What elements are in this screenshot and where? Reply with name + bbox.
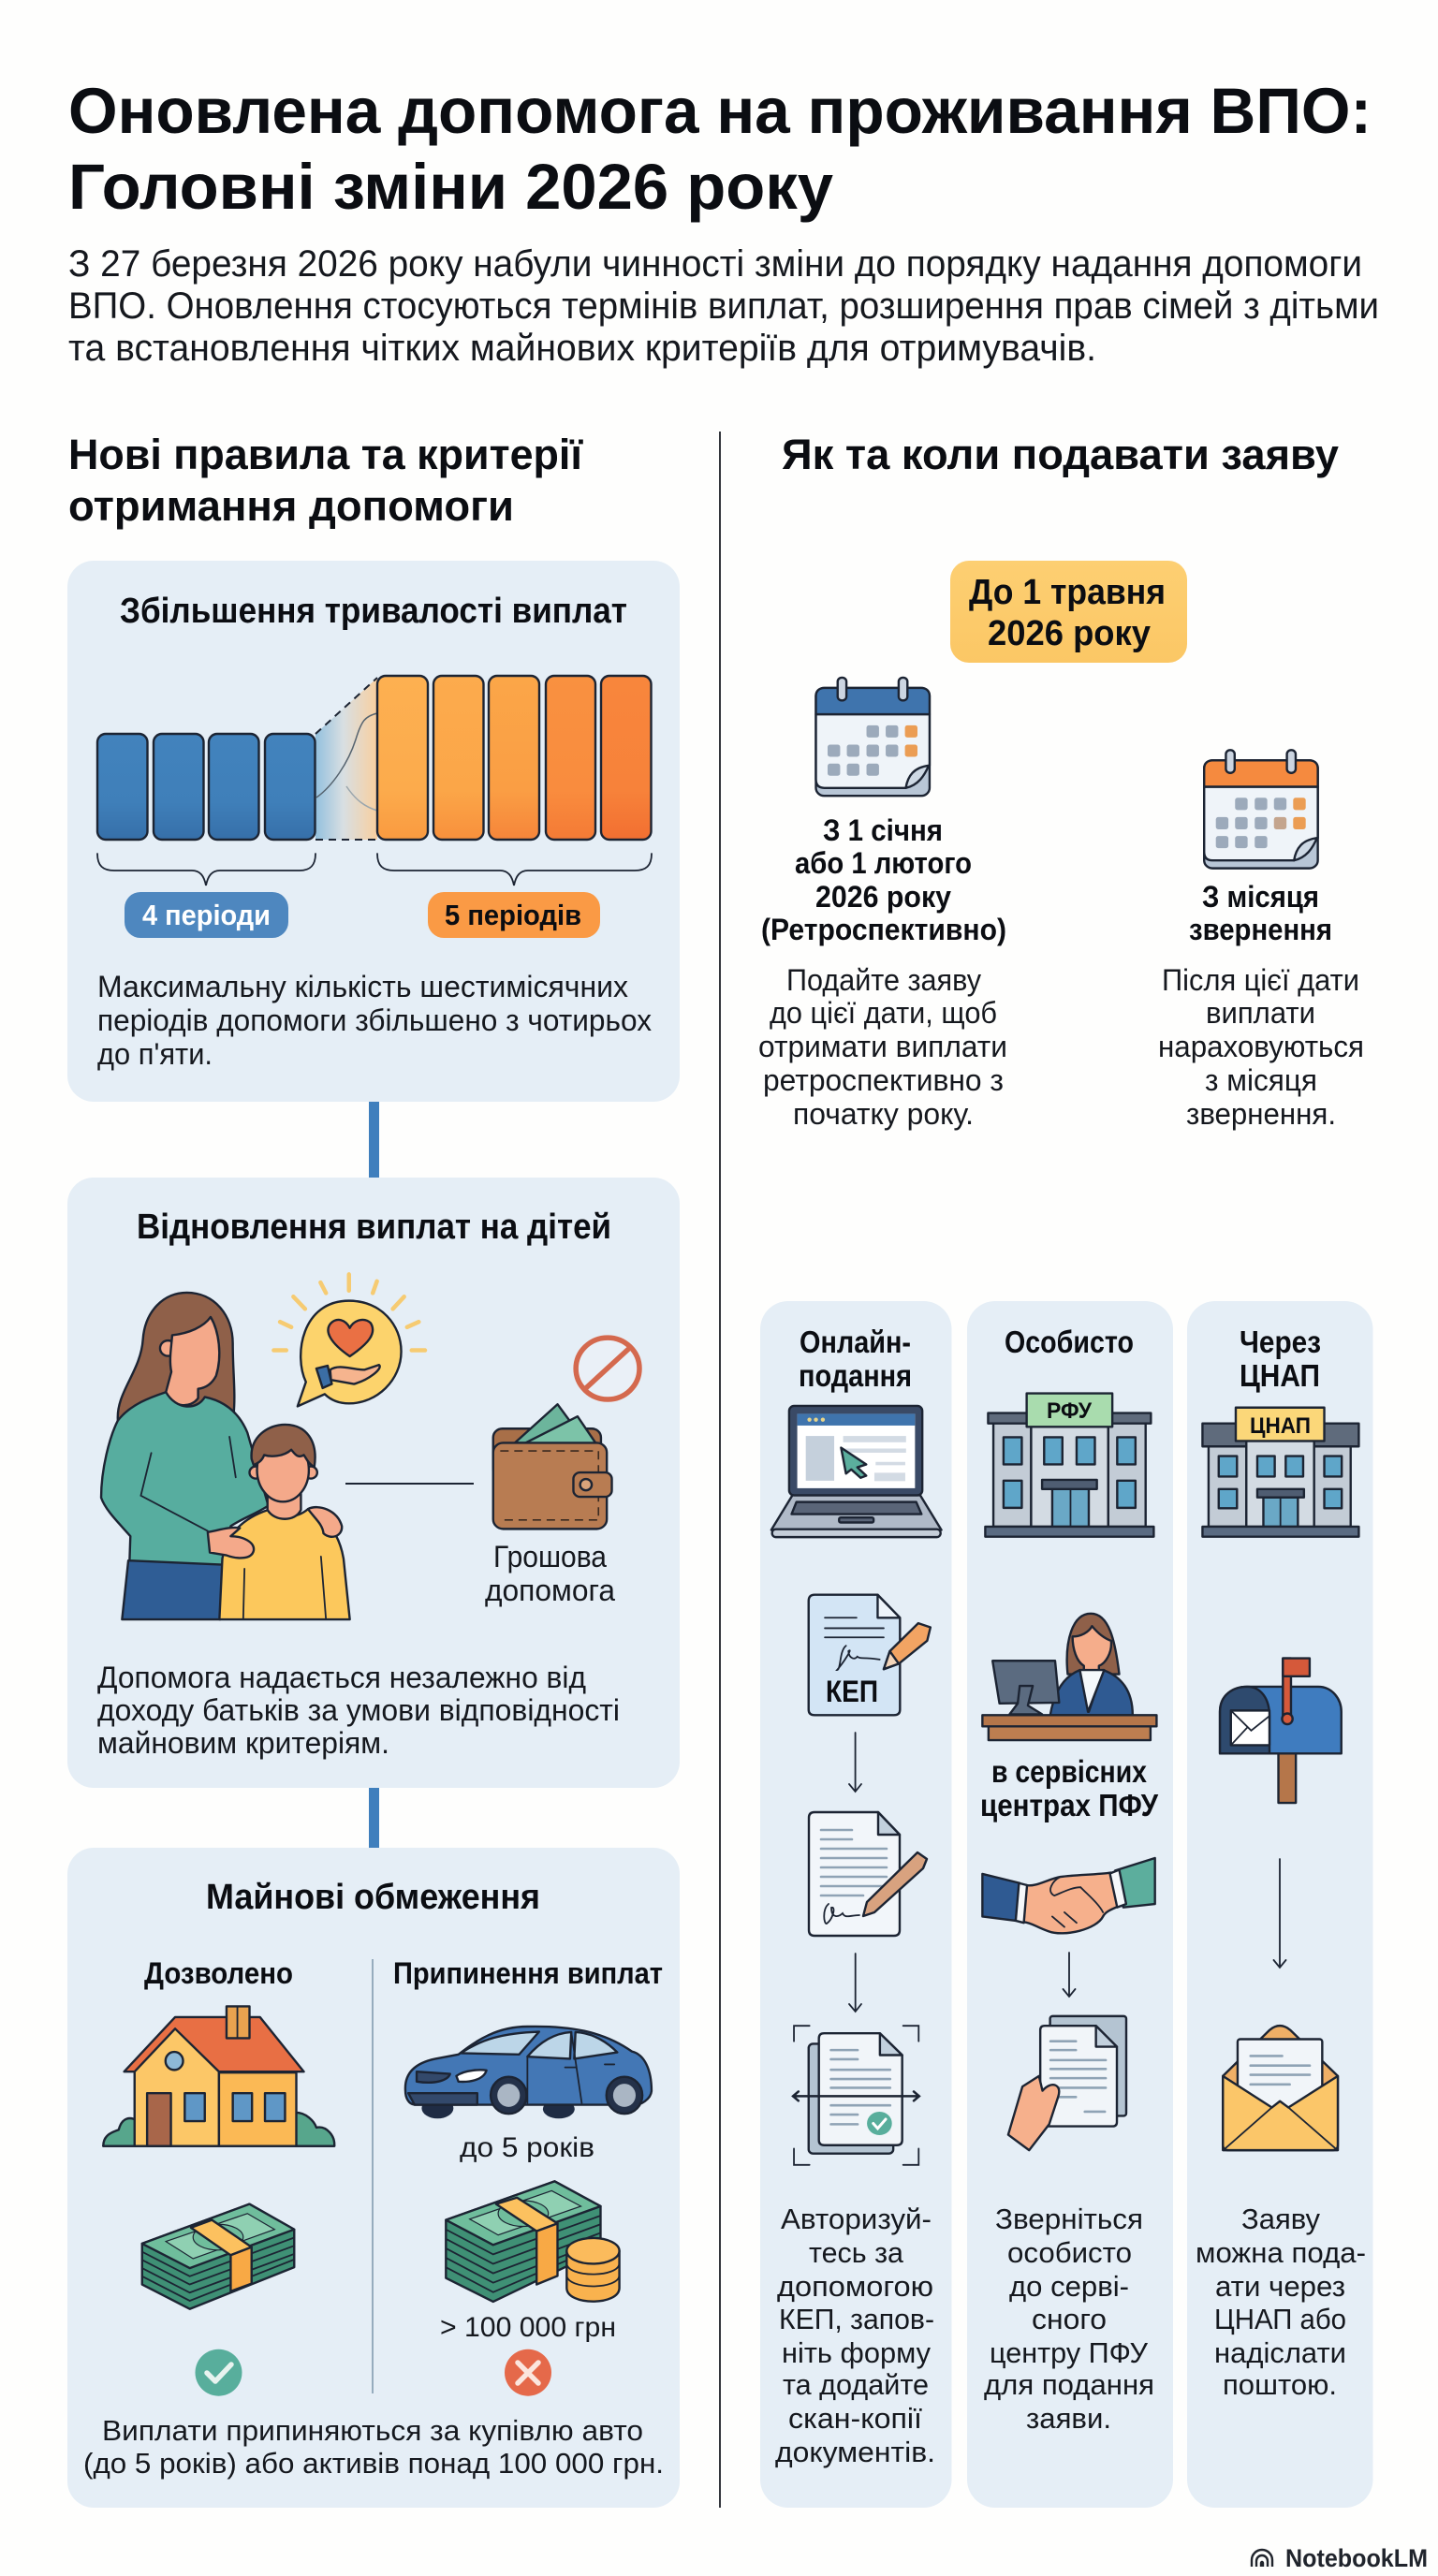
label: 5 periods xyxy=(428,892,600,938)
card body text: (до 5 років) або активів понад 100 000 грн. xyxy=(83,2447,664,2480)
brace: four periods xyxy=(97,854,315,886)
panel: online submission xyxy=(760,1301,951,2508)
timeline column: retroactive xyxy=(758,678,1007,1131)
icon: hand with documents xyxy=(1008,2016,1126,2150)
icon: scanned document xyxy=(793,2026,919,2165)
description: надіслати xyxy=(1214,2336,1346,2369)
card body text xyxy=(97,1661,620,1760)
panel: in person xyxy=(967,1301,1173,2508)
description: центру ПФУ xyxy=(990,2336,1148,2369)
description: отримати виплати xyxy=(758,1030,1007,1063)
arrow xyxy=(1064,1953,1075,1997)
title: Головні зміни 2026 року xyxy=(68,151,833,223)
card heading: Майнові обмеження xyxy=(206,1878,540,1917)
label: 4 periods xyxy=(125,892,288,938)
label: over 100000 UAH: > 100 000 грн xyxy=(440,2312,616,2343)
description: тесь за xyxy=(809,2236,904,2269)
section heading: how and when: Як та коли подавати заяву xyxy=(782,431,1339,478)
date heading xyxy=(761,813,1006,946)
deadline badge: До 1 травня xyxy=(969,573,1166,612)
date heading: звернення xyxy=(1189,913,1332,946)
deadline badge: 2026 року xyxy=(988,614,1151,653)
icon: laptop xyxy=(771,1406,942,1537)
section heading: rules: Нові правила та критерії xyxy=(68,431,583,478)
timeline column: from month of application xyxy=(1158,750,1364,1131)
description: до цієї дати, щоб xyxy=(770,996,997,1030)
description: початку року. xyxy=(793,1097,974,1131)
icon: blue calendar xyxy=(816,678,930,796)
description: ніть форму xyxy=(782,2336,931,2369)
label: financial aid xyxy=(485,1540,615,1607)
connector: card 2 to card 3 xyxy=(369,1788,379,1848)
column heading: ЦНАП xyxy=(1240,1358,1320,1393)
card body text: доходу батьків за умови відповідності xyxy=(97,1693,620,1727)
column heading: подання xyxy=(799,1358,912,1393)
description: та додайте xyxy=(783,2368,929,2401)
card body text: Допомога надається незалежно від xyxy=(97,1661,586,1694)
label: financial aid: допомога xyxy=(485,1573,615,1607)
icon: cash stack allowed xyxy=(142,2204,294,2309)
connecting line xyxy=(345,1483,474,1485)
card body text xyxy=(97,970,652,1071)
description: до серві- xyxy=(1009,2270,1129,2303)
description: для подання xyxy=(984,2368,1154,2401)
description: виплати xyxy=(1206,996,1315,1030)
card heading: Відновлення виплат на дітей xyxy=(137,1208,611,1247)
title xyxy=(68,75,1372,223)
description: скан-копії xyxy=(788,2402,922,2435)
icon: cash stack with coins xyxy=(446,2181,620,2302)
title: Оновлена допомога на проживання ВПО: xyxy=(68,75,1372,147)
icon: check mark xyxy=(195,2349,242,2396)
icon: car xyxy=(405,2027,652,2118)
column heading: Через xyxy=(1240,1325,1321,1359)
illustration: mother and child xyxy=(101,1293,350,1619)
label: KEP: КЕП xyxy=(826,1675,878,1708)
intro text: ВПО. Оновлення стосуються термінів виплат, розширення прав сімей з дітьми xyxy=(68,285,1379,327)
panel: via CNAP xyxy=(1187,1301,1372,2508)
description xyxy=(1196,2203,1366,2401)
description: Заяву xyxy=(1241,2203,1320,2235)
description: КЕП, запов- xyxy=(779,2303,934,2335)
subheading: allowed: Дозволено xyxy=(144,1956,293,1990)
subheading: service centers: в сервісних xyxy=(991,1754,1148,1789)
sign: РФУ: РФУ xyxy=(1047,1398,1093,1424)
column heading: Онлайн- xyxy=(800,1325,911,1359)
description: ати через xyxy=(1215,2270,1345,2303)
section heading: rules: отримання допомоги xyxy=(68,482,514,530)
brace: five periods xyxy=(377,854,652,886)
icon: cross mark xyxy=(505,2349,551,2396)
label: 4 periods: 4 періоди xyxy=(142,899,271,931)
card heading: Збільшення тривалості виплат xyxy=(120,592,627,631)
description: можна пода- xyxy=(1196,2236,1366,2269)
card body text: Максимальну кількість шестимісячних xyxy=(97,970,628,1003)
connector: card 1 to card 2 xyxy=(369,1102,379,1178)
date heading: (Ретроспективно) xyxy=(761,913,1006,946)
panel: property limits xyxy=(67,1848,680,2508)
intro text xyxy=(68,243,1379,369)
arrow xyxy=(849,1954,861,2012)
description: допомогою xyxy=(777,2270,933,2303)
column heading xyxy=(799,1325,912,1393)
icon: envelope xyxy=(1223,2026,1338,2150)
arrow xyxy=(1273,1859,1286,1968)
date heading: або 1 лютого xyxy=(795,846,972,880)
description: ретроспективно з xyxy=(763,1063,1004,1097)
date heading: З місяця xyxy=(1202,880,1319,914)
date heading xyxy=(1189,880,1332,946)
bar chart: 4 blue periods to 5 orange periods xyxy=(97,676,652,840)
icon: speech bubble with heart and hand xyxy=(273,1274,425,1406)
description xyxy=(758,963,1007,1131)
panel: restored child payments xyxy=(67,1178,680,1788)
card body text: майновим критеріям. xyxy=(97,1726,389,1760)
icon: CNAP building xyxy=(1202,1408,1358,1537)
description: ЦНАП або xyxy=(1214,2303,1346,2335)
description: особисто xyxy=(1007,2236,1132,2269)
arrow xyxy=(849,1733,861,1792)
section heading: rules xyxy=(68,431,583,530)
description: сного xyxy=(1032,2303,1107,2335)
column divider xyxy=(719,432,721,2508)
description: Авторизуй- xyxy=(781,2203,932,2235)
icon: form with pen xyxy=(809,1812,927,1936)
description: заяви. xyxy=(1026,2402,1111,2435)
icon: mailbox xyxy=(1220,1659,1342,1803)
intro text: та встановлення чітких майнових критеріїв для отримувачів. xyxy=(68,328,1096,369)
label: 5 periods: 5 періодів xyxy=(445,899,581,931)
label: financial aid: Грошова xyxy=(493,1540,607,1573)
description: Подайте заяву xyxy=(786,963,981,997)
label: up to 5 years: до 5 років xyxy=(460,2132,594,2163)
subheading: service centers: центрах ПФУ xyxy=(980,1788,1158,1822)
brand: NotebookLM: NotebookLM xyxy=(1285,2544,1428,2572)
sign: ЦНАП: ЦНАП xyxy=(1250,1413,1311,1439)
description: Зверніться xyxy=(995,2203,1143,2235)
description: нараховуються xyxy=(1158,1030,1364,1063)
panel: payment duration xyxy=(67,561,680,1102)
description xyxy=(775,2203,935,2468)
icon: handshake xyxy=(982,1858,1155,1933)
column heading xyxy=(1240,1325,1321,1393)
deadline badge xyxy=(950,561,1187,663)
description xyxy=(1158,963,1364,1131)
column heading: Особисто xyxy=(1005,1325,1134,1359)
intro text: З 27 березня 2026 року набули чинності зміни до порядку надання допомоги xyxy=(68,243,1362,285)
card body text: Виплати припиняються за купівлю авто xyxy=(102,2414,643,2447)
icon: service desk employee xyxy=(982,1614,1156,1740)
icon: orange calendar xyxy=(1204,750,1318,869)
date heading: 2026 року xyxy=(815,880,951,914)
card body text: періодів допомоги збільшено з чотирьох xyxy=(97,1003,652,1037)
description: з місяця xyxy=(1205,1063,1317,1097)
icon: pension fund building xyxy=(985,1394,1153,1537)
icon: KEP signature document xyxy=(809,1595,931,1715)
subheading: service centers xyxy=(980,1754,1158,1822)
description: звернення. xyxy=(1186,1097,1336,1131)
card body text xyxy=(83,2414,664,2480)
icon: house xyxy=(103,2006,334,2146)
card body text: до п'яти. xyxy=(97,1037,213,1071)
description: документів. xyxy=(775,2436,935,2468)
date heading: З 1 січня xyxy=(823,813,943,847)
description: поштою. xyxy=(1223,2368,1337,2401)
description: Після цієї дати xyxy=(1162,963,1359,997)
subheading: payments stop: Припинення виплат xyxy=(393,1956,663,1990)
description xyxy=(984,2203,1154,2435)
icon: wallet with prohibition sign xyxy=(493,1338,639,1529)
